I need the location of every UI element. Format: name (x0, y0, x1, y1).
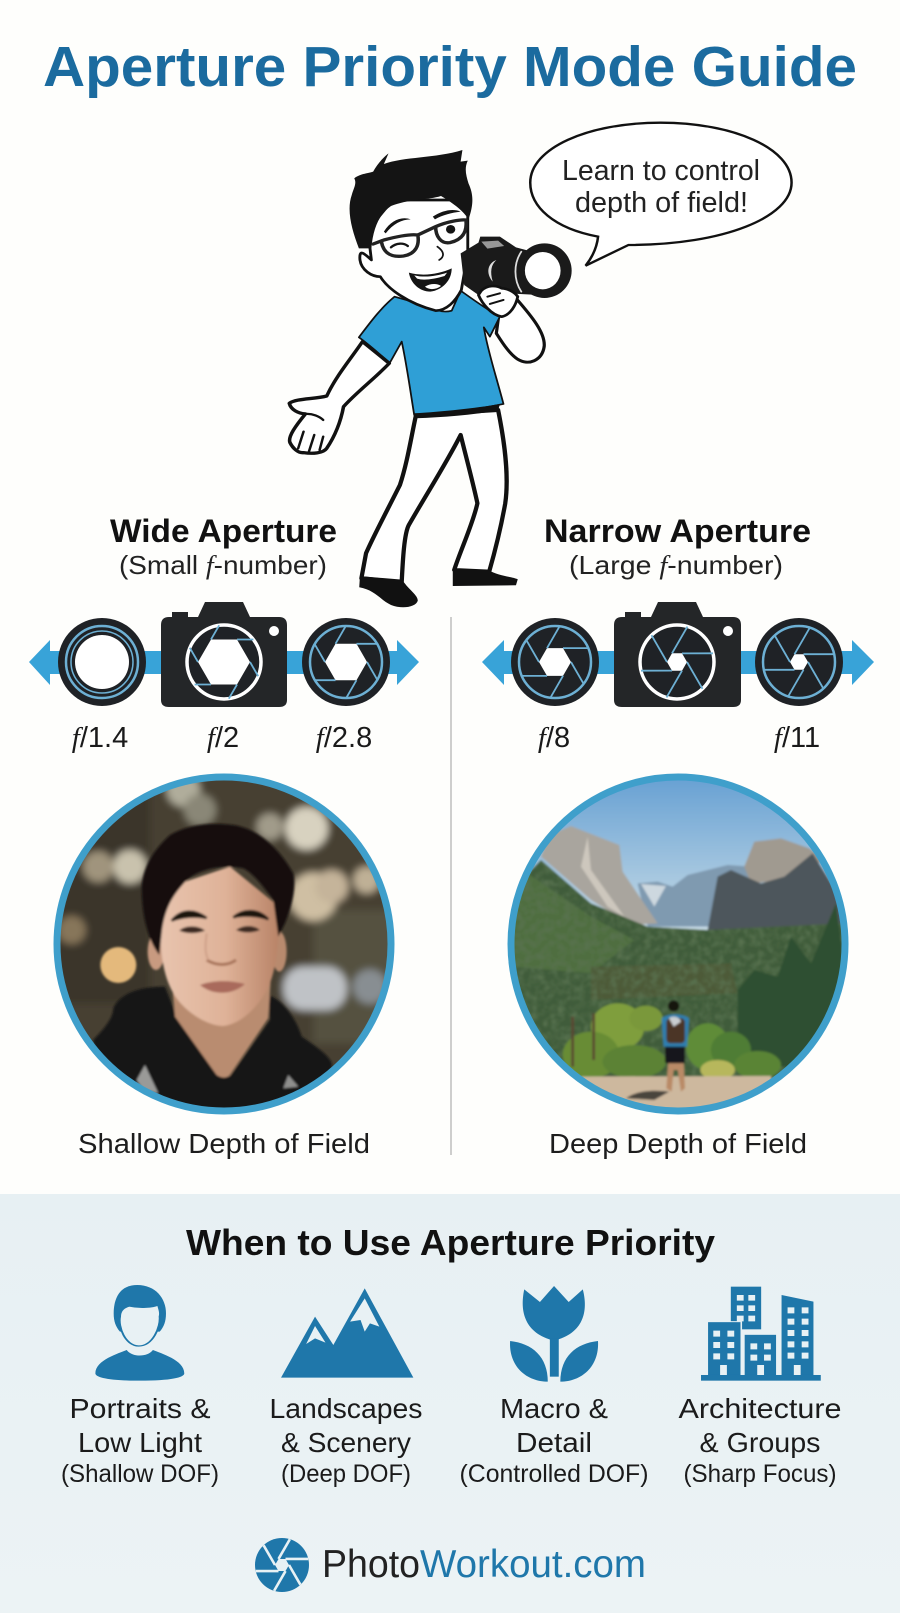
left arm and open hand (289, 342, 389, 453)
column: macro: (Controlled DOF) (460, 1460, 648, 1488)
glasses (373, 220, 466, 256)
column: landscapes: & Scenery (281, 1427, 411, 1458)
nose shadow (207, 960, 236, 964)
trousers (361, 410, 507, 582)
dead tree trunks (573, 1013, 594, 1067)
right shoe (453, 570, 518, 586)
column: architecture: Architecture (678, 1393, 842, 1424)
f-number labels (72, 722, 820, 754)
hiker (662, 1000, 689, 1092)
face (161, 867, 278, 1026)
forest valley (516, 860, 842, 1079)
logo: PhotoWorkout.com: Workout.com (420, 1543, 646, 1586)
iris f/2.8 (302, 618, 390, 706)
column: macro: Macro & (500, 1393, 608, 1424)
iris f/8 (511, 618, 599, 706)
heading: wide aperture: (Small f-number) (119, 550, 327, 580)
caption: shallow depth of field: Shallow Depth of Field (78, 1128, 370, 1159)
eyes (179, 926, 205, 933)
right dark cliff (708, 853, 844, 933)
heading: narrow aperture: (Large f-number) (569, 550, 783, 580)
speech bubble (530, 123, 792, 266)
heading: wide aperture: Wide Aperture (110, 513, 337, 549)
column: portraits: Portraits & (70, 1393, 211, 1424)
icon: mountains (281, 1288, 413, 1378)
sky (532, 780, 828, 932)
cartoon photographer character (289, 150, 572, 607)
eyebrows (172, 912, 207, 921)
f-number labels: f/11 (774, 722, 820, 754)
f-number labels: f/2.8 (316, 722, 372, 754)
hoodie (93, 987, 332, 1120)
right arm holding camera (496, 298, 544, 362)
hair (142, 824, 294, 955)
double arrow (482, 640, 874, 685)
panel: when to use (0, 1194, 900, 1613)
icon: tulip macro (510, 1286, 598, 1382)
warm bokeh light (100, 947, 136, 983)
column: portraits (61, 1393, 219, 1488)
title: Aperture Priority Mode Guide (43, 35, 857, 99)
heading: narrow aperture (544, 513, 811, 580)
camera with iris f/2 (161, 602, 287, 707)
neck (172, 980, 271, 1077)
forest texture (516, 863, 841, 1076)
logo: aperture icon (255, 1538, 309, 1592)
portrait photo: shallow depth of field (50, 770, 400, 1120)
hand on camera (478, 286, 518, 317)
f-number labels: f/8 (538, 722, 570, 754)
landscape photo: deep depth of field (504, 770, 854, 1117)
logo: PhotoWorkout.com (322, 1543, 646, 1586)
camera (461, 237, 572, 298)
f-number labels: f/1.4 (72, 722, 128, 754)
smiling mouth (409, 268, 452, 292)
panel heading: When to Use Aperture Priority (186, 1222, 715, 1263)
left shoe (359, 576, 418, 607)
column: architecture: (Sharp Focus) (684, 1460, 836, 1488)
caption: deep depth of field: Deep Depth of Field (549, 1128, 807, 1159)
column: architecture: & Groups (700, 1427, 820, 1458)
right trees (738, 903, 848, 1067)
divider (450, 617, 452, 1155)
iris f/11 (755, 618, 843, 706)
icon: city buildings (701, 1287, 821, 1381)
aperture scale: wide (29, 602, 419, 707)
column: macro: Detail (516, 1427, 592, 1458)
column: landscapes: (Deep DOF) (281, 1460, 411, 1488)
f-number labels: f/2 (207, 722, 239, 754)
iris f/1.4 (58, 618, 146, 706)
eye and eyebrows (384, 210, 461, 260)
column: macro (460, 1393, 648, 1488)
column: landscapes: Landscapes (270, 1393, 422, 1424)
camera with small iris (614, 602, 741, 707)
rock ground (581, 1074, 773, 1108)
heading: wide aperture (110, 513, 337, 580)
speech bubble: Learn to control (562, 155, 760, 187)
foreground bushes (563, 1003, 781, 1080)
distant mountains (638, 865, 751, 927)
heading: narrow aperture: Narrow Aperture (544, 513, 811, 549)
logo: PhotoWorkout.com: Photo (322, 1543, 420, 1586)
column: landscapes (270, 1393, 422, 1488)
shirt hem shadow (414, 404, 500, 418)
column: portraits: (Shallow DOF) (61, 1460, 219, 1488)
left cliff (541, 826, 658, 925)
double arrow (29, 640, 419, 685)
speech bubble: depth of field! (575, 187, 748, 219)
blue t-shirt (359, 291, 503, 415)
hair (350, 150, 472, 248)
right peak (744, 838, 824, 883)
lips (200, 981, 245, 993)
face (360, 200, 468, 311)
ears (148, 933, 164, 970)
column: portraits: Low Light (78, 1427, 202, 1458)
column: architecture (678, 1393, 842, 1488)
aperture scale: narrow (482, 602, 874, 707)
icon: portrait person (95, 1285, 184, 1381)
blurred bokeh background (60, 780, 388, 1078)
